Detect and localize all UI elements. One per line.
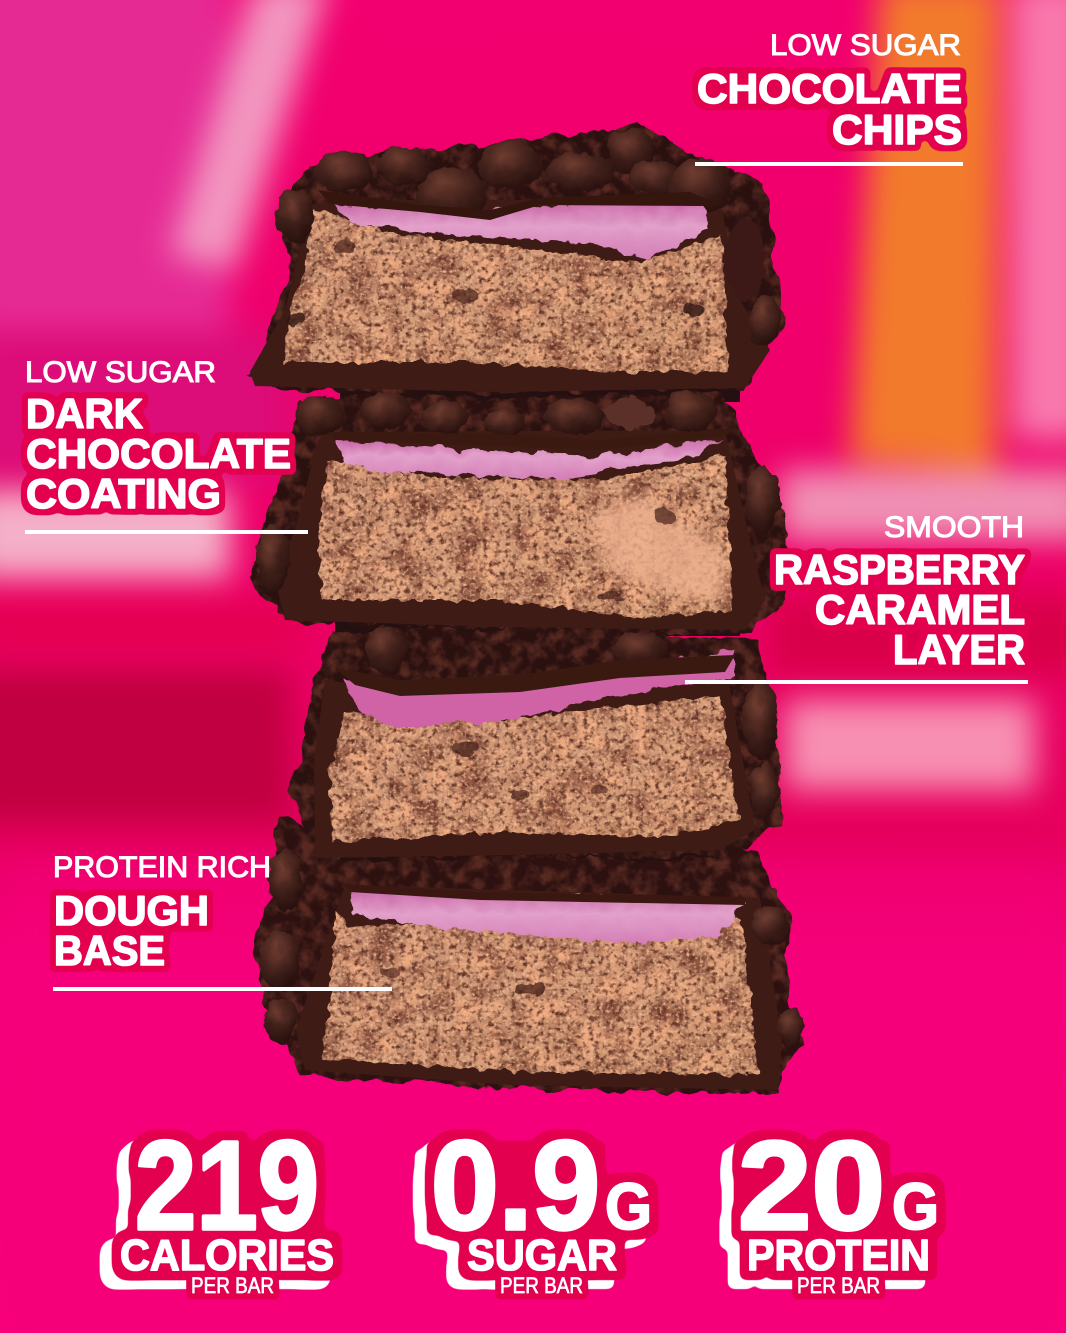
heading: dough base [54, 887, 209, 974]
subheading: low sugar: LOW SUGAR [770, 29, 961, 62]
stat: 219 calories per bar [120, 1115, 334, 1298]
heading: chocolate chips: CHOCOLATE [697, 65, 962, 112]
caption: per bar: PER BAR [797, 1273, 880, 1298]
stat value: 0.9g sugar: SUGAR [467, 1231, 617, 1280]
bar 3 [292, 626, 780, 858]
leader line [53, 987, 392, 991]
heading: dark chocolate coating [26, 390, 291, 517]
heading: raspberry caramel layer [774, 546, 1025, 673]
caption: per bar: PER BAR [500, 1273, 583, 1298]
heading: dark chocolate coating: CHOCOLATE [26, 430, 291, 477]
heading: dark chocolate coating: DARK [26, 390, 143, 437]
stat value: 0.9g sugar [431, 1115, 652, 1280]
bar 4: bottom [255, 815, 805, 1094]
heading: chocolate chips [697, 65, 962, 153]
leader line [695, 162, 963, 166]
callout: raspberry caramel layer [685, 511, 1028, 684]
stat value: 0.9g sugar: 0.9 [431, 1115, 600, 1256]
stat value: 0.9g sugar: G [605, 1169, 652, 1243]
subheading: low sugar: LOW SUGAR [25, 356, 216, 389]
stat value: 20g protein: G [892, 1169, 939, 1243]
stat value: 219 calories: CALORIES [120, 1231, 334, 1280]
heading: dark chocolate coating: COATING [26, 470, 221, 517]
heading: dough base: BASE [54, 927, 165, 974]
stat value: 20g protein: PROTEIN [747, 1231, 930, 1280]
bar stack [248, 125, 805, 1094]
leader line [25, 530, 308, 534]
caption: per bar: PER BAR [191, 1273, 274, 1298]
stat: 0.9g sugar per bar [431, 1115, 652, 1298]
stat: 20g protein per bar [738, 1115, 939, 1298]
heading: chocolate chips: CHIPS [832, 106, 962, 153]
bar 1: top [248, 125, 785, 392]
heading: raspberry caramel layer: CARAMEL [815, 586, 1025, 633]
bar 2 [250, 390, 790, 632]
leader line [685, 680, 1028, 684]
stat value: 219 calories: 219 [135, 1115, 319, 1256]
callout: chocolate chips [695, 29, 963, 166]
stat value: 20g protein [738, 1115, 939, 1280]
heading: raspberry caramel layer: RASPBERRY [774, 546, 1025, 593]
callout: dough base [53, 851, 392, 991]
stat value: 20g protein: 20 [738, 1115, 885, 1256]
heading: raspberry caramel layer: LAYER [893, 626, 1025, 673]
callout: dark chocolate coating [25, 356, 308, 534]
subheading: smooth: SMOOTH [884, 511, 1024, 544]
subheading: protein rich: PROTEIN RICH [53, 851, 271, 884]
heading: dough base: DOUGH [54, 887, 209, 934]
